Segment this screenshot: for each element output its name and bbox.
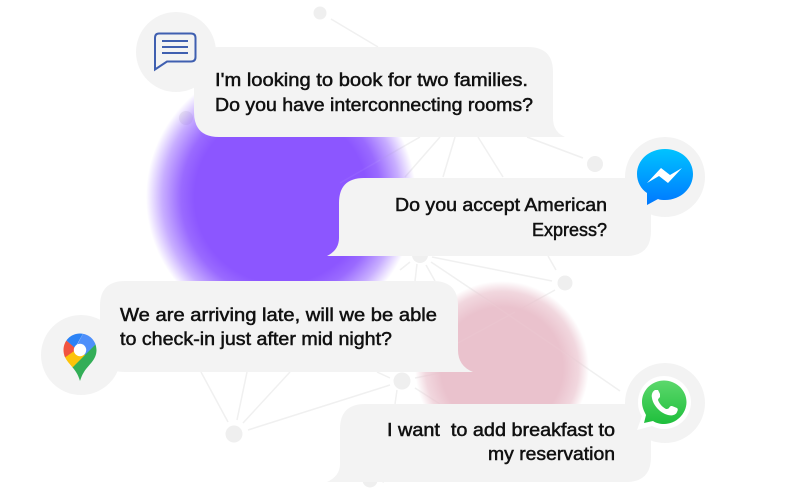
icon: messenger logo <box>637 149 693 205</box>
question text: Do you accept American <box>395 195 607 215</box>
question text <box>215 70 533 115</box>
speech bubble <box>327 178 651 256</box>
icon: chat lines <box>155 34 196 70</box>
pink gradient blob <box>415 281 589 455</box>
question text <box>387 420 615 464</box>
panel: question about interconnecting rooms <box>136 12 565 137</box>
question text: I want to add breakfast to <box>387 420 615 440</box>
background network of nodes and lines <box>179 6 620 488</box>
question text: to check-in just after mid night? <box>120 329 392 349</box>
icon circle: chat <box>136 12 216 92</box>
icon circle: maps <box>41 315 121 395</box>
question text <box>395 195 607 240</box>
question text: my reservation <box>488 444 615 464</box>
faint network lines over blobs <box>340 137 620 391</box>
icon circle: messenger <box>625 137 705 217</box>
icon: whatsapp logo <box>637 376 691 430</box>
panel: question about late check-in <box>41 281 473 395</box>
panel: question about American Express <box>327 137 705 256</box>
speech bubble <box>100 281 473 372</box>
question text: I'm looking to book for two families. <box>215 70 528 90</box>
purple gradient blob <box>146 62 416 332</box>
question text: We are arriving late, will we be able <box>120 305 437 325</box>
icon circle: whatsapp <box>625 363 705 443</box>
question text: Express? <box>532 220 607 240</box>
question text <box>120 305 437 349</box>
speech bubble <box>327 404 651 482</box>
speech bubble <box>194 47 565 137</box>
panel: question about breakfast <box>327 363 705 482</box>
question text: Do you have interconnecting rooms? <box>215 95 533 115</box>
icon: map pin <box>64 334 96 381</box>
